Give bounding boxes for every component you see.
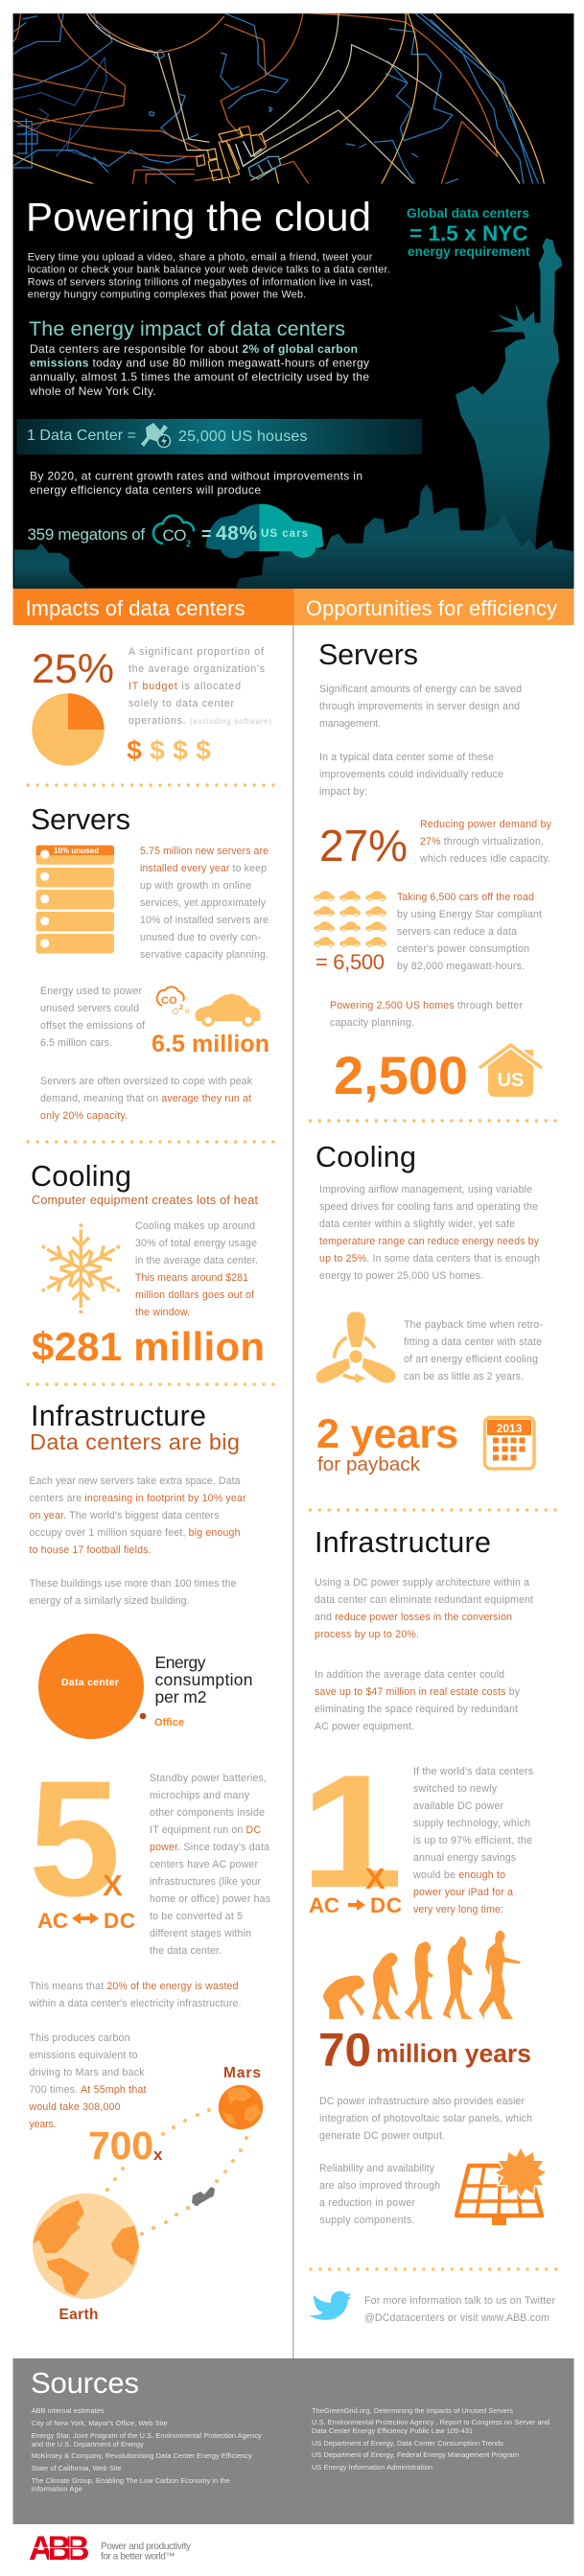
header: opportunities for efficiency: Opportunities for efficiency (306, 596, 557, 620)
big number 25%: 25% (32, 646, 114, 692)
panel: cooling opportunities (315, 1141, 543, 1475)
icon: fan (316, 1311, 395, 1383)
tagline (101, 2541, 191, 2562)
servers intro text: improvements could individually reduce (319, 769, 503, 780)
dc power text: different stages within (150, 1928, 251, 1939)
dc power text: the data center. (150, 1945, 222, 1957)
icon: plug (141, 423, 171, 447)
dc supply text (412, 1766, 533, 1915)
dc supply text: switched to newly (413, 1783, 498, 1795)
panel: infrastructure impact (29, 1400, 270, 2323)
header: opportunities for efficiency (293, 589, 573, 625)
capacity planning text: Powering 2,500 US homes through better (330, 1000, 523, 1011)
callout: global data centers: Global data centers (407, 206, 529, 220)
servers text: 5.75 million new servers are (140, 846, 269, 857)
subheading: Computer equipment creates lots of heat (32, 1194, 259, 1207)
big number 2,500: 2,500 (334, 1045, 468, 1105)
dc supply text: available DC power (413, 1800, 503, 1812)
dc supply text: power your iPad for a (413, 1887, 513, 1898)
payback text: of art energy efficient cooling (404, 1354, 538, 1365)
IT budget text: IT budget is allocated (128, 681, 241, 692)
energy impact paragraph: Data centers are responsible for about 2% of global carbon (30, 342, 358, 356)
IT budget text: solely to data center (128, 698, 234, 709)
intro text: Every time you upload a video, share a photo, email a friend, tweet your (28, 251, 373, 263)
band: 1 data center equals 25,000 houses: 1 Data Center = (27, 428, 136, 444)
heading: servers: Servers (31, 803, 130, 836)
heading: infrastructure: Infrastructure (31, 1400, 206, 1432)
stat: 359 megatons equals 48% of US cars: = (201, 524, 212, 544)
sources left column: State of California, Web Site (32, 2464, 122, 2472)
oversized servers text: Servers are often oversized to cope with peak (40, 1076, 253, 1087)
servers text: up with growth in online (140, 880, 251, 892)
big number $281 million: $281 million (32, 1324, 265, 1369)
big number 27%: 27% (319, 821, 408, 870)
dc supply text: supply technology, which (413, 1818, 530, 1829)
dc architecture text: eliminating the space required by redundant (315, 1704, 518, 1715)
icon: evolution of man (323, 1930, 520, 2019)
solar integration text: integration of photovoltaic solar panels, which (319, 2113, 532, 2124)
heading: energy impact: The energy impact of data centers (29, 317, 345, 340)
panel: IT budget (32, 646, 271, 766)
mars trip text: 700 times. At 55mph that (29, 2084, 147, 2096)
2020 forecast text (30, 470, 362, 497)
heading: cooling: Cooling (315, 1141, 416, 1173)
dc power text: centers have AC power (150, 1859, 258, 1870)
icon: dollar signs: $ (127, 735, 142, 765)
airflow text: energy to power 25,000 US homes. (319, 1270, 483, 1282)
dc supply text: annual energy savings (413, 1852, 516, 1864)
footprint text: energy of a similarly sized building. (29, 1595, 190, 1607)
panel: sources (13, 2358, 573, 2524)
payback text: fitting a data center with state (404, 1336, 542, 1348)
energy star text: Taking 6,500 cars off the road (397, 892, 534, 903)
unused servers text: offset the emissions of (40, 1020, 145, 1032)
payback text: The payback time when retro- (404, 1319, 543, 1331)
energy impact paragraph: emissions today and use 80 million megawatt-hours of energy (30, 357, 369, 370)
capacity planning text: capacity planning. (330, 1017, 414, 1029)
panel: servers opportunities (314, 638, 552, 1105)
logo: ABB: ABB (29, 2530, 90, 2567)
virtualization text: 27% through virtualization, (420, 836, 544, 847)
callout: global data centers: = 1.5 x NYC (409, 221, 527, 245)
label earth: Earth (59, 2307, 98, 2323)
footprint text (29, 1475, 246, 1607)
chart: energy per m2 circles: Energy (155, 1653, 206, 1672)
big number 1x: X (365, 1862, 385, 1895)
dc supply text: is up to 97% efficient, the (413, 1835, 532, 1846)
big number 70 million years (318, 2024, 531, 2077)
2020 forecast text: energy efficiency data centers will produce (30, 483, 261, 497)
icon: co2 cloud: CO (161, 995, 177, 1007)
energy star text: by 82,000 megawatt-hours. (397, 961, 525, 972)
big number 2 years: 2 years (316, 1411, 458, 1457)
AC to DC arrow: AC (309, 1893, 339, 1917)
servers intro text: Significant amounts of energy can be saved (319, 684, 522, 695)
sources right column (312, 2406, 549, 2472)
sources left column (32, 2406, 262, 2493)
icon: server stack: 10% unused (54, 847, 99, 855)
dc power text (150, 1773, 270, 1957)
unused servers text: 6.5 million cars. (40, 1037, 112, 1049)
big number 70 million years: 70 (318, 2024, 371, 2077)
stat: 359 megatons equals 48% of US cars: 48% (216, 522, 257, 545)
2020 forecast text: By 2020, at current growth rates and without improvements in (30, 470, 362, 483)
virtualization text: which reduces idle capacity. (419, 853, 550, 865)
airflow text (319, 1184, 540, 1282)
servers text: unused due to overly con- (140, 932, 261, 943)
dc power text: power. Since today's data (150, 1842, 269, 1853)
sources left column: Information Age (32, 2485, 82, 2493)
energy impact paragraph: annually, almost 1.5 times the amount of electricity used by the (30, 370, 369, 383)
sources right column: U.S. Environmental Protection Agency , Report to Congress on Server and (312, 2418, 549, 2426)
footprint text: centers are increasing in footprint by 10% year (29, 1493, 246, 1504)
dc architecture text: save up to $47 million in real estate costs by (315, 1686, 521, 1698)
dc architecture text: data center can eliminate redundant equipment (315, 1594, 533, 1606)
sources left column: The Climate Group, Enabling The Low Carbon Economy in the (32, 2476, 230, 2485)
airflow text: data center within a slightly wider, yet safe (319, 1218, 515, 1230)
intro text (28, 251, 390, 300)
panel: infrastructure opportunities (300, 1526, 546, 2226)
dc supply text: very very long time: (413, 1904, 503, 1915)
icon: grey car (192, 2187, 215, 2206)
dc power text: other components inside (150, 1807, 265, 1819)
panel: servers impact (31, 803, 269, 1122)
dc architecture text (315, 1577, 533, 1732)
big number 5x: X (103, 1868, 123, 1902)
servers intro text: In a typical data center some of these (319, 752, 494, 763)
cooling text: million dollars goes out of (135, 1289, 254, 1301)
AC to DC arrow: DC (370, 1893, 402, 1917)
chart: energy per m2 circles: Data center (61, 1677, 119, 1688)
intro text: Rows of servers storing trillions of megabytes of information live in vast, (28, 276, 373, 288)
icon: solar panel and sun (456, 2148, 546, 2225)
payback text: can be as little as 2 years. (404, 1371, 524, 1382)
statue of liberty (456, 238, 562, 589)
icon: co2 cloud: CO (163, 526, 186, 545)
icon: dollar signs: $ (173, 735, 188, 765)
IT budget text: the average organization's (128, 663, 265, 675)
virtualization text: Reducing power demand by (420, 819, 552, 830)
servers intro text: management. (319, 718, 381, 730)
diagram: earth to mars (33, 2065, 263, 2323)
dc power text: infrastructures (like your (150, 1876, 261, 1888)
airflow text: temperature range can reduce energy needs by (319, 1236, 540, 1247)
icon: house (479, 1045, 542, 1097)
sources right column: US Energy Information Administration (312, 2463, 432, 2472)
globe map illustration (13, 13, 544, 184)
dc power text: to be converted at 5 (150, 1911, 243, 1922)
icon: mars (219, 2085, 263, 2129)
heading: sources: Sources (31, 2366, 139, 2400)
unused servers text: unused servers could (40, 1003, 139, 1014)
icon: co2 cloud (153, 516, 194, 548)
solar integration text: generate DC power output. (319, 2130, 445, 2142)
IT budget text (128, 646, 271, 727)
cooling text (135, 1220, 258, 1318)
solar integration text: are also improved through (319, 2180, 440, 2192)
tagline: Power and productivity (101, 2541, 191, 2552)
sources right column: TheGreenGrid.org, Determining the Impacts of Unused Servers (312, 2406, 513, 2415)
sources left column: Energy Star, Joint Program of the U.S. Environmental Protection Agency (32, 2431, 262, 2440)
energy impact paragraph: whole of New York City. (29, 384, 156, 398)
cooling text: Cooling makes up around (135, 1220, 255, 1232)
solar integration text: a reduction in power (319, 2197, 415, 2209)
solar integration text: supply components. (320, 2215, 414, 2226)
energy impact paragraph (29, 342, 369, 398)
twitter text (364, 2295, 555, 2324)
subheading: Data centers are big (30, 1429, 240, 1454)
energy star text: center's power consumption (397, 943, 529, 955)
heading: cooling: Cooling (31, 1160, 131, 1193)
intro text: location or check your bank balance your web device talks to a data center. (28, 264, 390, 275)
icon: calendar 2013 (485, 1417, 534, 1469)
icon: co2 cloud: 2 (186, 539, 191, 548)
unused servers text: Energy used to power (40, 986, 142, 997)
servers intro text (319, 684, 522, 798)
icon: earth (33, 2193, 139, 2299)
sources right column: US Department of Energy, Data Center Consumption Trends (312, 2439, 503, 2448)
label 700x: 700 (88, 2123, 153, 2168)
diagram: earth to mars: x (153, 2146, 163, 2164)
sources left column: McKinsey & Company, Revolutionising Data Center Energy Efficiency (32, 2451, 252, 2460)
sources right column: US Department of Energy, Federal Energy Management Program (312, 2450, 519, 2459)
mars trip text: years. (29, 2119, 56, 2130)
footprint text: Each year new servers take extra space. Data (29, 1475, 241, 1487)
cooling text: This means around $281 (135, 1272, 248, 1284)
intro text: energy hungry computing complexes that power the Web. (28, 289, 306, 300)
pie chart 25% (32, 693, 105, 766)
footprint text: to house 17 football fields. (29, 1544, 152, 1556)
icon: car (195, 994, 261, 1027)
dc architecture text: AC power equipment. (315, 1721, 414, 1732)
chart: energy per m2 circles: per m2 (155, 1687, 207, 1706)
energy star text (397, 892, 542, 972)
virtualization text (419, 819, 552, 865)
tagline: for a better world™ (101, 2552, 175, 2562)
wasted energy text (29, 1981, 242, 2009)
dc architecture text: and reduce power losses in the conversion (315, 1612, 512, 1623)
city skyline left (14, 544, 86, 589)
icon: grid of cars (314, 891, 386, 947)
big number = 6,500: = 6,500 (315, 950, 385, 974)
twitter text: @DCdatacenters or visit www.ABB.com (364, 2312, 549, 2324)
dc supply text: would be enough to (412, 1869, 505, 1881)
heading: infrastructure: Infrastructure (315, 1526, 491, 1559)
oversized servers text: demand, meaning that on average they run at (40, 1093, 251, 1104)
IT budget text: A significant proportion of (128, 646, 264, 658)
mars trip text: emissions equivalent to (29, 2050, 138, 2061)
dc architecture text: process by up to 20%. (315, 1629, 419, 1640)
dc power text: home or office) power has (150, 1893, 270, 1905)
energy star text: by using Energy Star compliant (397, 909, 542, 920)
icon: dollar signs (127, 735, 211, 765)
servers text (140, 846, 269, 961)
capacity planning text (330, 1000, 523, 1029)
dc power text: Standby power batteries, (150, 1773, 267, 1784)
wasted energy text: This means that 20% of the energy is wasted (29, 1981, 239, 1992)
stat: 359 megatons equals 48% of US cars (27, 504, 323, 558)
solar integration text (319, 2096, 532, 2226)
footprint text: occupy over 1 million square feet, big enough (29, 1527, 241, 1539)
band: 1 data center equals 25,000 houses (17, 419, 422, 454)
sources left column: City of New York, Mayor's Office, Web Site (32, 2419, 168, 2427)
footprint text: These buildings use more than 100 times the (29, 1578, 237, 1590)
icon: server stack (36, 846, 114, 953)
airflow text: speed drives for cooling fans and operating the (319, 1201, 538, 1213)
icon: co2 cloud: 2 (179, 1005, 183, 1011)
sources right column: Data Center Energy Efficiency Public Law 109-431 (312, 2426, 473, 2435)
cooling text: the window. (135, 1307, 190, 1318)
stat: 359 megatons equals 48% of US cars: 359 megatons of (27, 525, 145, 544)
chart: energy per m2 circles: Office (154, 1717, 184, 1729)
AC to DC arrow (309, 1893, 402, 1917)
city skyline right (236, 484, 573, 589)
dc power text: microchips and many (150, 1790, 250, 1801)
AC to DC conversion: AC (37, 1909, 68, 1933)
dc power text: IT equipment run on DC (150, 1824, 261, 1836)
cooling text: in the average data center. (135, 1255, 258, 1266)
header: impacts of data centers (13, 589, 293, 625)
servers text: installed every year to keep (140, 863, 267, 874)
servers text: 10% of installed servers are (140, 915, 269, 926)
solar integration text: Reliability and availability (319, 2163, 435, 2174)
panel: hero (13, 13, 573, 589)
sources left column: ABB internal estimates (32, 2406, 105, 2415)
icon: house: US (498, 1070, 524, 1091)
big number 70 million years: million years (376, 2039, 531, 2068)
airflow text: up to 25%. In some data centers that is enough (319, 1253, 540, 1265)
dc supply text: If the world's data centers (413, 1766, 533, 1777)
icon: dollar signs: $ (196, 735, 211, 765)
mars trip text: driving to Mars and back (29, 2067, 145, 2078)
icon: twitter bird (309, 2291, 351, 2320)
AC to DC conversion (37, 1909, 135, 1933)
column divider (292, 625, 293, 2358)
icon: car split (206, 504, 323, 558)
icon: co2 cloud (157, 986, 189, 1014)
icon: dollar signs: $ (150, 735, 165, 765)
panel: cooling impact (31, 1160, 265, 1369)
callout: global data centers (407, 206, 530, 259)
cooling text: 30% of total energy usage (135, 1238, 257, 1249)
servers intro text: through improvements in server design and (319, 701, 520, 712)
stat: 359 megatons equals 48% of US cars: US cars (261, 528, 308, 540)
unused servers text (40, 986, 145, 1049)
solar integration text: DC power infrastructure also provides easier (319, 2096, 525, 2107)
servers text: services, yet approximately (140, 897, 267, 909)
twitter text: For more information talk to us on Twitter (364, 2295, 555, 2307)
IT budget text: operations. (excluding software) (128, 715, 271, 727)
servers intro text: impact by: (319, 786, 367, 798)
energy star text: servers can reduce a data (397, 926, 517, 938)
label mars: Mars (223, 2065, 261, 2081)
big number 6.5 million: 6.5 million (152, 1031, 269, 1057)
servers text: servative capacity planning. (140, 949, 269, 961)
dotted route (105, 2108, 248, 2236)
AC to DC conversion: DC (104, 1909, 135, 1933)
icon: snowflake (37, 1223, 125, 1313)
airflow text: Improving airflow management, using variable (319, 1184, 532, 1195)
big number 1x: 1 (300, 1742, 403, 1921)
header: impacts of data centers: Impacts of data centers (25, 596, 245, 620)
heading: servers: Servers (318, 638, 418, 671)
oversized servers text: only 20% capacity. (40, 1110, 128, 1122)
sources left column: and the U.S. Department of Energy (32, 2440, 144, 2448)
dc architecture text: Using a DC power supply architecture within a (315, 1577, 529, 1589)
callout: global data centers: energy requirement (408, 244, 530, 259)
payback text (404, 1319, 543, 1382)
for payback: for payback (317, 1453, 421, 1475)
mars trip text: would take 308,000 (29, 2101, 121, 2113)
dc architecture text: In addition the average data center could (315, 1669, 504, 1681)
footprint text: on year. The world's biggest data centers (29, 1510, 219, 1521)
mars trip text (29, 2032, 147, 2130)
icon: calendar 2013: 2013 (497, 1422, 523, 1435)
chart: energy per m2 circles: consumption (155, 1670, 253, 1689)
band: 1 data center equals 25,000 houses: 25,000 US houses (178, 429, 307, 445)
oversized servers text (40, 1076, 253, 1122)
mars trip text: This produces carbon (29, 2032, 130, 2044)
wasted energy text: within a data center's electricity infrastructure. (29, 1998, 242, 2009)
title: Powering the cloud (26, 194, 371, 240)
chart: energy per m2 circles (38, 1634, 253, 1739)
big number 5x: 5 (29, 1747, 121, 1931)
